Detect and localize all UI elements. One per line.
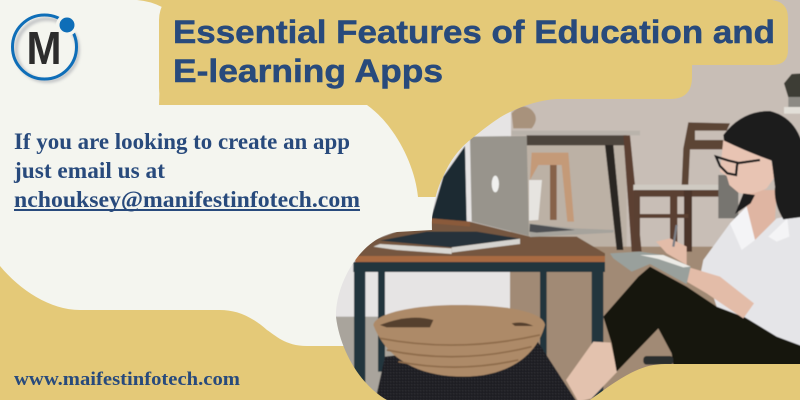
basket xyxy=(373,305,545,377)
logo ring xyxy=(12,15,76,79)
logo xyxy=(12,14,78,81)
contact text block xyxy=(13,129,360,213)
contact line 1: If you are looking to create an app xyxy=(14,129,350,155)
desk frame xyxy=(353,262,605,272)
title banner xyxy=(159,0,788,105)
forearm and hands xyxy=(687,267,754,318)
apple logo xyxy=(492,176,499,192)
plant and pot xyxy=(784,73,800,97)
website url: www.maifestinfotech.com xyxy=(14,370,241,390)
floor xyxy=(510,246,722,400)
vase xyxy=(512,107,536,128)
notebook on desk xyxy=(373,244,452,254)
glasses xyxy=(716,157,760,175)
mug xyxy=(529,180,542,221)
logo shadow xyxy=(16,19,78,81)
open book xyxy=(610,252,691,284)
email underline xyxy=(14,209,360,211)
back table xyxy=(512,131,640,135)
contact line 2: just email us at xyxy=(13,158,165,184)
black trousers xyxy=(603,267,800,372)
logo letter: M xyxy=(26,22,62,74)
neck xyxy=(747,190,777,240)
laptop xyxy=(470,136,529,236)
lower leg xyxy=(566,342,617,400)
wall xyxy=(510,0,800,248)
cream blob panel xyxy=(0,0,437,346)
photo: woman writing beside a desk with laptop xyxy=(330,0,800,400)
stool xyxy=(530,153,574,222)
chair xyxy=(682,122,730,185)
pen xyxy=(673,225,677,247)
pillar xyxy=(718,175,738,218)
dark board xyxy=(430,146,467,222)
face xyxy=(720,140,775,194)
hair xyxy=(723,111,800,219)
title line 1: Essential Features of Education and xyxy=(173,14,775,50)
shelf mesh xyxy=(375,340,577,400)
logo dot xyxy=(60,18,74,32)
white shirt xyxy=(700,207,800,347)
title line 2: E-learning Apps xyxy=(173,53,443,89)
desk wood top xyxy=(350,218,605,260)
email address: nchouksey@manifestinfotech.com xyxy=(14,187,360,213)
ring gap xyxy=(56,14,78,36)
